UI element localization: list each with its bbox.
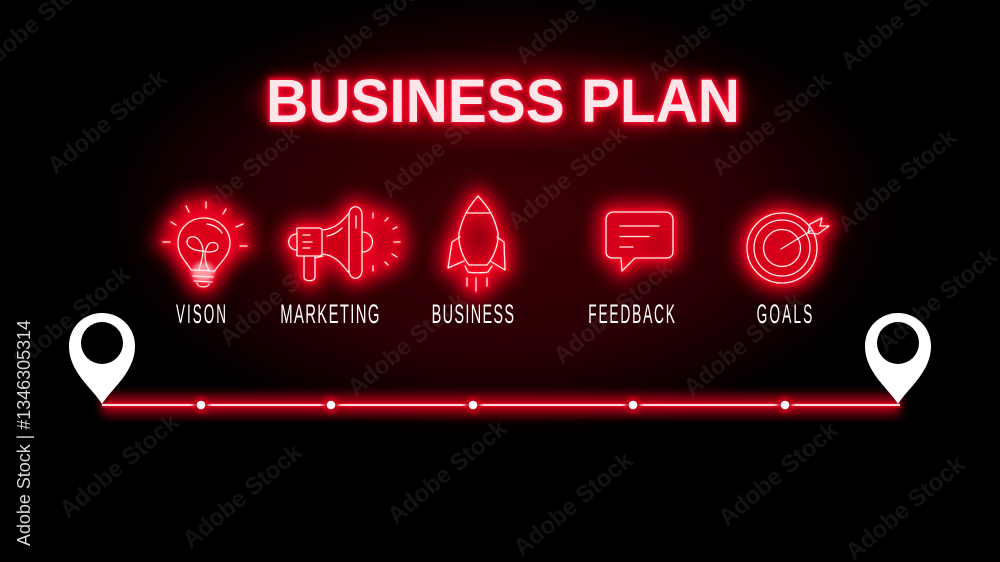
icon: right map pin <box>865 313 931 404</box>
icon: megaphone <box>289 206 400 281</box>
watermark: Adobe Stock <box>502 120 633 236</box>
watermark: Adobe Stock <box>832 123 963 239</box>
watermark: Adobe Stock <box>678 286 809 402</box>
timeline <box>102 395 900 415</box>
label: goals: GOALS <box>757 299 814 329</box>
watermark: Adobe Stock <box>872 242 1000 358</box>
stock id text: Adobe Stock | #1346305314 <box>14 320 34 546</box>
icon: speech bubble <box>606 212 673 271</box>
title: BUSINESS PLAN <box>266 67 740 135</box>
icon: rocket <box>448 196 505 291</box>
watermark: Adobe Stock <box>706 66 837 182</box>
watermark: Adobe Stock <box>376 88 507 204</box>
label: vison: VISON <box>176 299 228 329</box>
watermark: Adobe Stock <box>214 236 345 352</box>
icon: target <box>747 213 829 283</box>
label: business: BUSINESS <box>432 298 515 329</box>
watermark: Adobe Stock <box>177 438 308 554</box>
watermark: Adobe Stock <box>5 260 136 376</box>
label: feedback: FEEDBACK <box>588 299 677 329</box>
watermark: Adobe Stock <box>508 446 639 562</box>
title: BUSINESS PLAN <box>266 67 740 135</box>
icon: left map pin <box>69 313 135 404</box>
watermark: Adobe Stock <box>342 286 473 402</box>
watermark: Adobe Stock <box>54 408 185 524</box>
watermark: Adobe Stock <box>548 254 679 370</box>
label: marketing: MARKETING <box>280 298 381 329</box>
title: BUSINESS PLAN <box>266 67 740 135</box>
watermark: Adobe Stock <box>382 414 513 530</box>
watermark: Adobe Stock <box>175 120 306 236</box>
timeline dots <box>193 397 793 413</box>
icon: light bulb <box>163 202 247 287</box>
watermark: Adobe Stock <box>42 64 173 180</box>
watermark: Adobe Stock <box>713 416 844 532</box>
